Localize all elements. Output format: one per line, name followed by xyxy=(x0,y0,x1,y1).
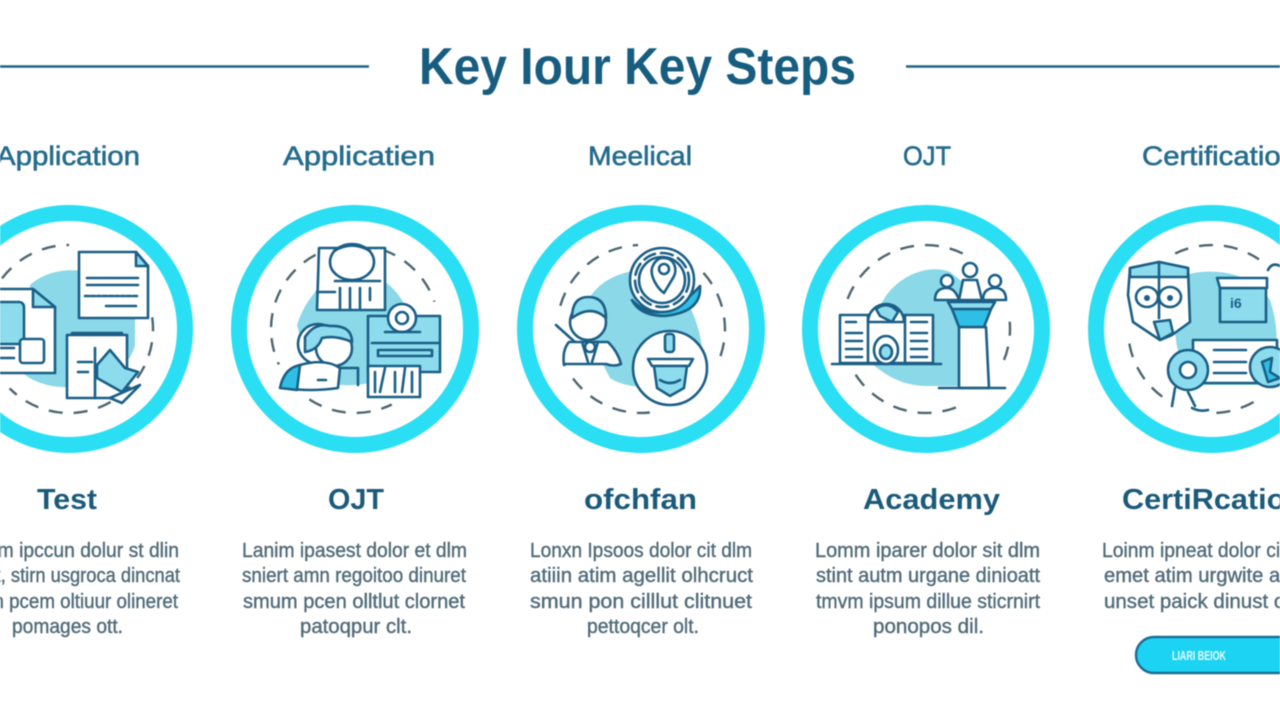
body text xyxy=(242,540,467,638)
icon: vision chart xyxy=(630,248,700,316)
body text xyxy=(0,540,180,638)
ring xyxy=(525,213,757,445)
ring xyxy=(0,213,185,445)
button xyxy=(1136,637,1280,673)
icon: control tower xyxy=(935,263,1006,388)
body text: atiiin atim agellit olhcruct xyxy=(530,565,753,587)
blob xyxy=(870,269,985,386)
body text: Lanim ipasest dolor et dlm xyxy=(242,540,467,562)
dashed orbit xyxy=(0,245,153,413)
panel: step 1 application test xyxy=(0,141,185,638)
subheading: ojt: OJT xyxy=(328,484,384,516)
panel: step 4 ojt academy xyxy=(810,141,1042,638)
body text xyxy=(815,540,1040,638)
subheading: academy: Academy xyxy=(863,484,1000,516)
dashed orbit xyxy=(1129,245,1261,413)
dashed orbit xyxy=(560,245,725,413)
blob xyxy=(297,271,415,385)
ring xyxy=(239,213,471,445)
heading: medical: Meelical xyxy=(588,141,692,171)
dashed orbit xyxy=(848,245,1010,413)
body text: Lomm iparer dolor sit dlm xyxy=(815,540,1040,562)
ring xyxy=(1096,213,1280,445)
body text: sniert amn regoitoo dinuret xyxy=(242,565,466,587)
icon: academy building xyxy=(832,304,941,364)
panel: step 2 application ojt xyxy=(239,141,471,638)
panel: step 3 medical xyxy=(525,141,757,638)
blob xyxy=(25,270,135,387)
heading: application: Applicatien xyxy=(283,141,435,171)
icon: clipboard and instructor xyxy=(317,244,385,310)
button: LIARI BEIOK xyxy=(1172,648,1226,663)
title: Key Iour Key Steps xyxy=(419,38,856,96)
body text: smun pon cilllut clitnuet xyxy=(530,591,752,613)
blob xyxy=(1175,272,1277,385)
icon: certificate card xyxy=(368,304,440,397)
icon: medical badge xyxy=(633,331,707,405)
blob xyxy=(588,270,702,387)
icon: protective mask xyxy=(1128,262,1190,340)
body text: stint autm urgane dinioatt xyxy=(816,565,1040,587)
body text: patoqpur clt. xyxy=(300,616,412,638)
dashed orbit xyxy=(271,250,434,413)
icon: people xyxy=(280,324,358,390)
panel: step 5 certification xyxy=(1096,141,1280,673)
icon: medical person xyxy=(556,297,621,366)
ring xyxy=(810,213,1042,445)
body text: tmvm ipsum dillue sticrnirt xyxy=(816,591,1040,613)
subheading: garbled word: ofchfan xyxy=(584,484,697,516)
body text: pomages ott. xyxy=(12,616,123,638)
body text: ponopos dil. xyxy=(873,616,984,638)
subheading: test: Test xyxy=(37,484,97,516)
body text xyxy=(1102,540,1280,613)
icon: certificate xyxy=(1168,340,1280,411)
body text: pettoqcer olt. xyxy=(587,616,699,638)
body text: Lonxn Ipsoos dolor cit dlm xyxy=(530,540,752,562)
icon: box xyxy=(1217,265,1280,322)
body text: smum pcen olltlut clornet xyxy=(243,591,465,613)
icon: documents xyxy=(0,252,148,403)
body text xyxy=(530,540,753,638)
heading: ojt: OJT xyxy=(903,141,951,171)
icon: box: i6 xyxy=(1230,295,1242,311)
